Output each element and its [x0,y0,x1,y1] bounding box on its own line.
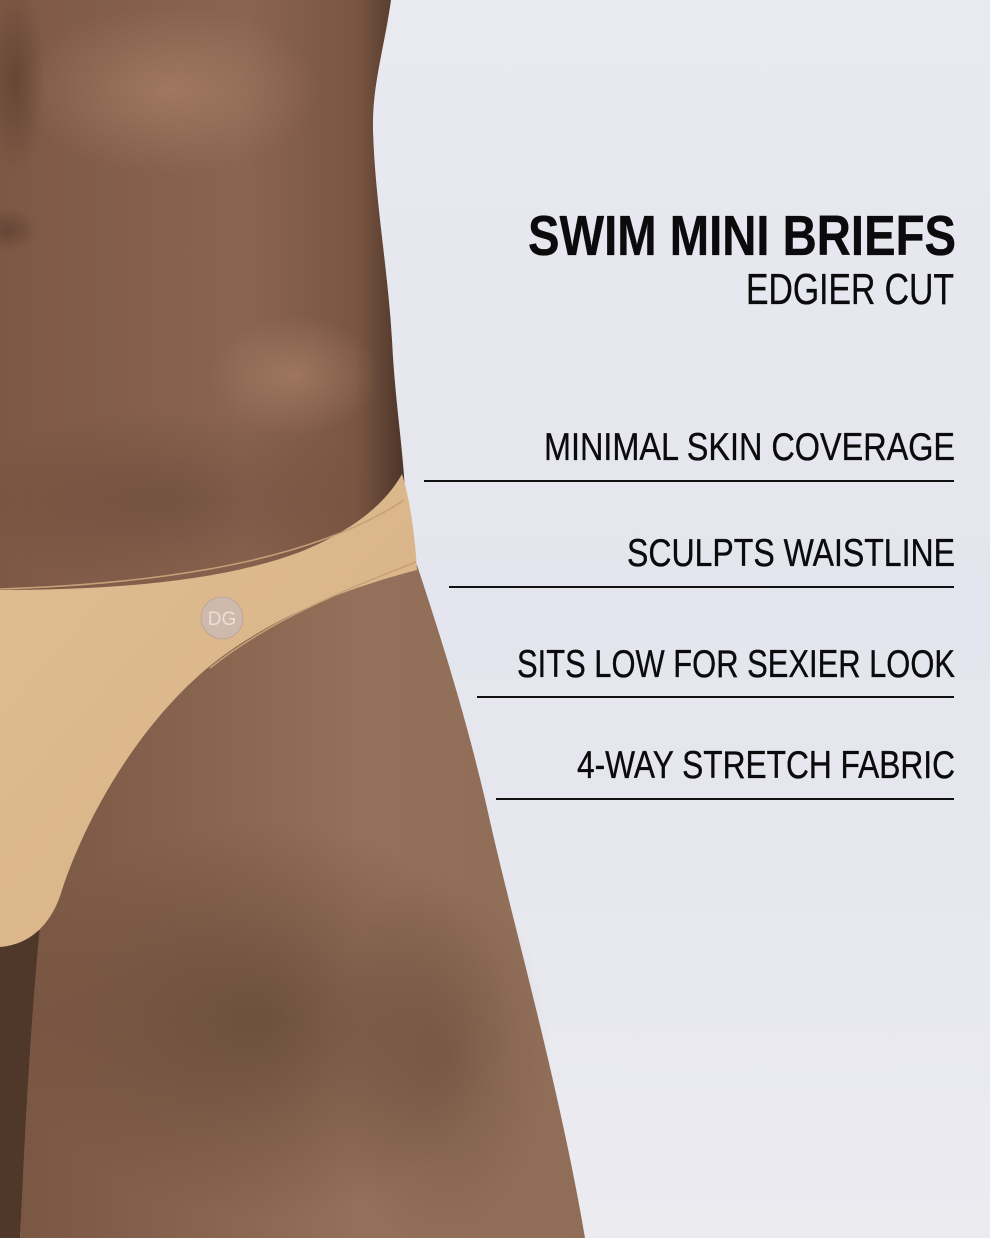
briefs waistband seam [0,500,416,668]
briefs [0,474,417,947]
logo button [201,597,243,639]
torso highlights [20,5,320,175]
torso [0,0,405,640]
logo button: DG [208,609,236,630]
photo: model torso and legs [0,0,585,1238]
near leg [20,565,585,1238]
heading [528,204,956,314]
far leg [0,930,45,1238]
feature list [424,426,955,800]
leg hair shading [10,820,510,1220]
